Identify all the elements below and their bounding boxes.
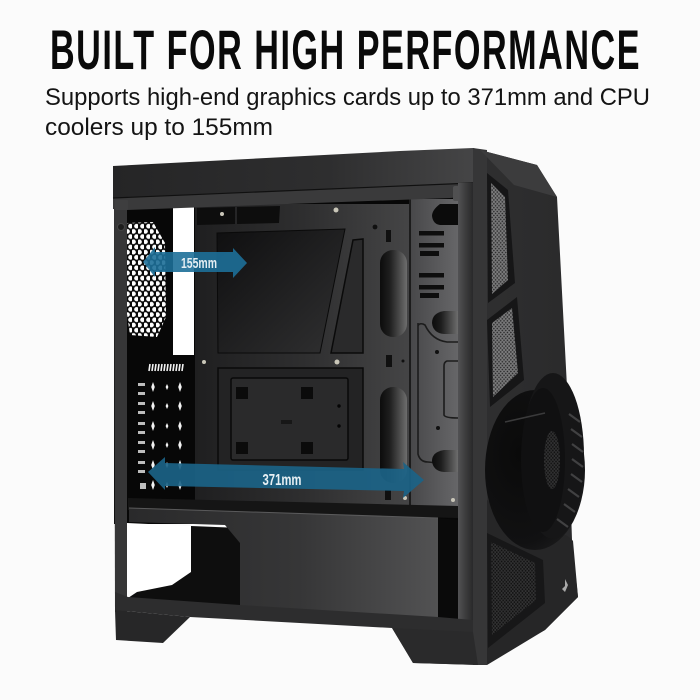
- CPU cutout plate: [231, 378, 348, 460]
- front side mesh lower: [487, 533, 545, 648]
- white rear opening: [173, 206, 194, 355]
- fan rim ribs: [557, 414, 583, 527]
- PSU shroud: [129, 508, 438, 618]
- bottom rail: [115, 592, 473, 633]
- arrow: 371mm graphics card clearance: 371mm: [262, 472, 302, 489]
- fan inner face: [521, 388, 565, 532]
- top rail shadow line: [113, 183, 473, 198]
- top rail: [113, 183, 473, 210]
- cable hole middle: [432, 311, 458, 334]
- front side mesh middle: [487, 297, 524, 407]
- lower housing wedge: [487, 500, 578, 665]
- logo mark: [562, 579, 568, 592]
- arrow: 155mm CPU cooler clearance: 155mm: [181, 256, 217, 272]
- case side and front body: [392, 148, 578, 665]
- front side mesh upper: [487, 173, 515, 303]
- front post: [458, 183, 473, 628]
- tray stamped channel: [418, 323, 458, 465]
- left rear post: [114, 198, 127, 612]
- motherboard tray: [195, 199, 458, 516]
- tray top dark cable recess: [197, 206, 280, 225]
- rear IO and expansion slots: [138, 364, 183, 490]
- tray triangular cutout: [331, 239, 363, 353]
- vent slots: [419, 231, 444, 298]
- lower interior motherboard shelf shadow: [128, 498, 458, 518]
- tray lower recess: [218, 368, 363, 470]
- fan bowl: [485, 390, 585, 550]
- PSU bay right gap: [438, 518, 458, 620]
- rear fan mesh: [126, 222, 166, 337]
- front foot: [392, 628, 478, 665]
- arrow: 371mm graphics card clearance: [148, 457, 424, 498]
- rear foot: [115, 610, 190, 643]
- front fan housing: [485, 373, 585, 550]
- arrow: 155mm CPU cooler clearance: [143, 247, 247, 278]
- top panel: [113, 148, 473, 198]
- tray cutout upper: [217, 229, 345, 353]
- small clips: [373, 225, 440, 500]
- top corner brackets: [115, 186, 468, 230]
- oval holes: [380, 250, 407, 483]
- fan inner mesh: [544, 431, 560, 489]
- subtitle: Supports high-end graphics cards up to 371mm and CPU: [45, 84, 650, 111]
- cable hole upper: [432, 204, 458, 225]
- standoffs: [202, 208, 455, 502]
- fan rim: [522, 373, 584, 539]
- white lower opening: [127, 523, 191, 592]
- cable hole lower: [432, 450, 458, 472]
- front column: [473, 148, 487, 665]
- subtitle: coolers up to 155mm: [45, 114, 273, 141]
- lower bay interior: [128, 526, 240, 606]
- front top bevel: [480, 150, 557, 197]
- PC case: [113, 148, 585, 665]
- fan highlight edge: [505, 413, 545, 422]
- case interior back wall: [114, 190, 473, 524]
- shroud top highlight: [129, 508, 438, 518]
